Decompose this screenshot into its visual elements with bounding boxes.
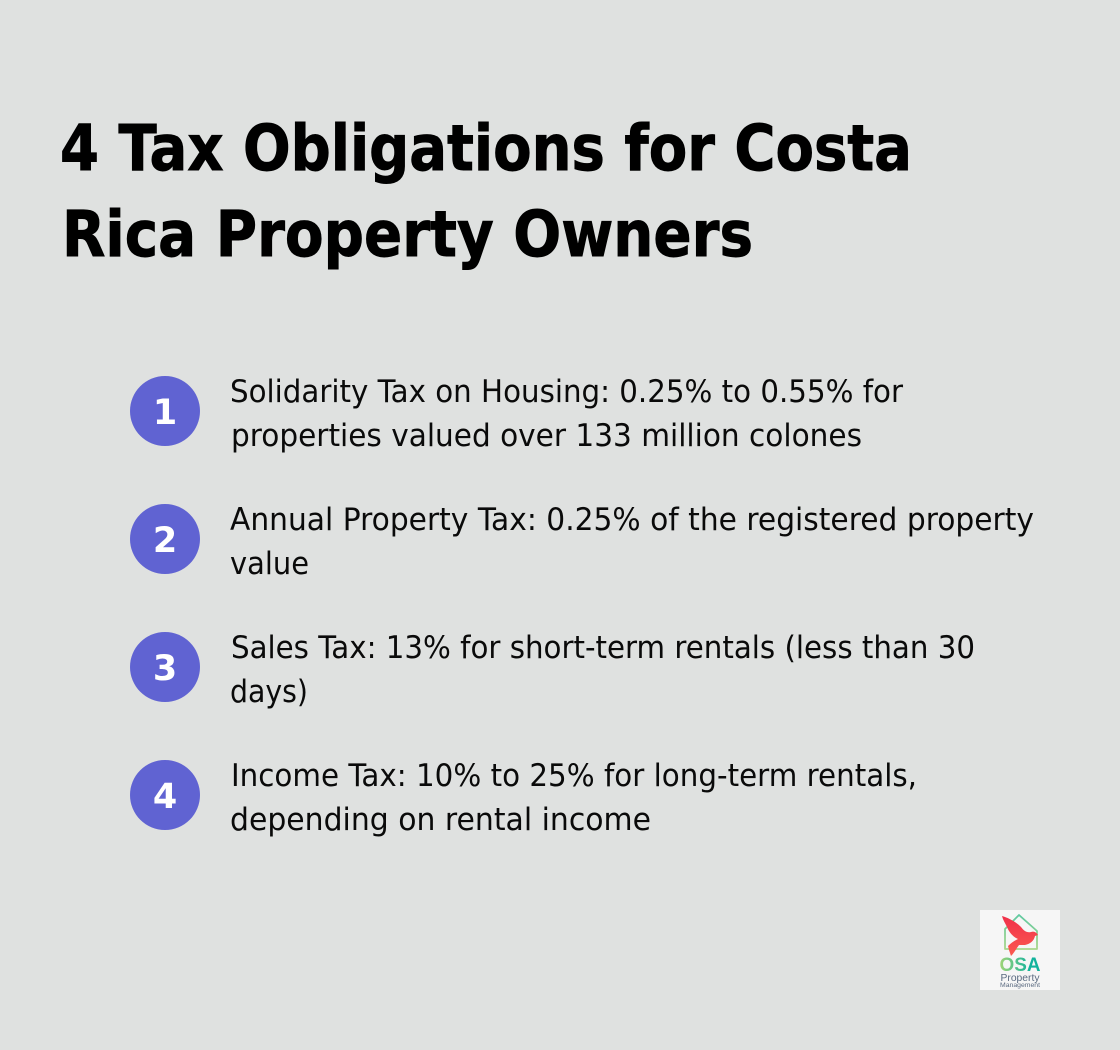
text: sales tax: Sales Tax: 13% for short-term rentals (less than 30 xyxy=(231,630,975,666)
logo: OSA Property Management xyxy=(980,910,1060,990)
logo wordmark: Management xyxy=(1000,983,1040,989)
text: solidarity tax xyxy=(230,374,903,454)
title: Rica Property Owners xyxy=(62,198,753,271)
number badge 3 xyxy=(130,632,200,702)
number badge 2 xyxy=(130,504,200,574)
number badge 1: 1 xyxy=(153,393,177,433)
number badge 4: 4 xyxy=(153,777,177,817)
number badge 1 xyxy=(130,376,200,446)
number badge 3: 3 xyxy=(153,649,177,689)
text: solidarity tax: properties valued over 133 million colones xyxy=(231,418,862,454)
text: income tax xyxy=(230,758,917,838)
text: annual property tax: Annual Property Tax: 0.25% of the registered property xyxy=(230,502,1034,538)
icon: house outline xyxy=(1005,915,1037,949)
text: sales tax: days) xyxy=(230,674,308,710)
text: annual property tax: value xyxy=(230,546,309,582)
title xyxy=(60,112,912,271)
list item 4: income tax xyxy=(130,758,917,838)
list item 1: solidarity tax xyxy=(130,374,903,454)
text: income tax: depending on rental income xyxy=(230,802,651,838)
text: sales tax xyxy=(230,630,975,710)
list item 3: sales tax xyxy=(130,630,975,710)
logo wordmark: Property xyxy=(1000,973,1040,984)
text: income tax: Income Tax: 10% to 25% for long-term rentals, xyxy=(231,758,917,794)
icon: red bird xyxy=(1002,916,1038,956)
list item 2: annual property tax xyxy=(130,502,1034,582)
text: solidarity tax: Solidarity Tax on Housing: 0.25% to 0.55% for xyxy=(230,374,903,410)
logo wordmark xyxy=(1000,955,1041,989)
text: annual property tax xyxy=(230,502,1034,582)
title: 4 Tax Obligations for Costa xyxy=(60,112,912,185)
number badge 4 xyxy=(130,760,200,830)
number badge 2: 2 xyxy=(153,521,177,561)
logo wordmark: OSA xyxy=(1000,955,1041,976)
